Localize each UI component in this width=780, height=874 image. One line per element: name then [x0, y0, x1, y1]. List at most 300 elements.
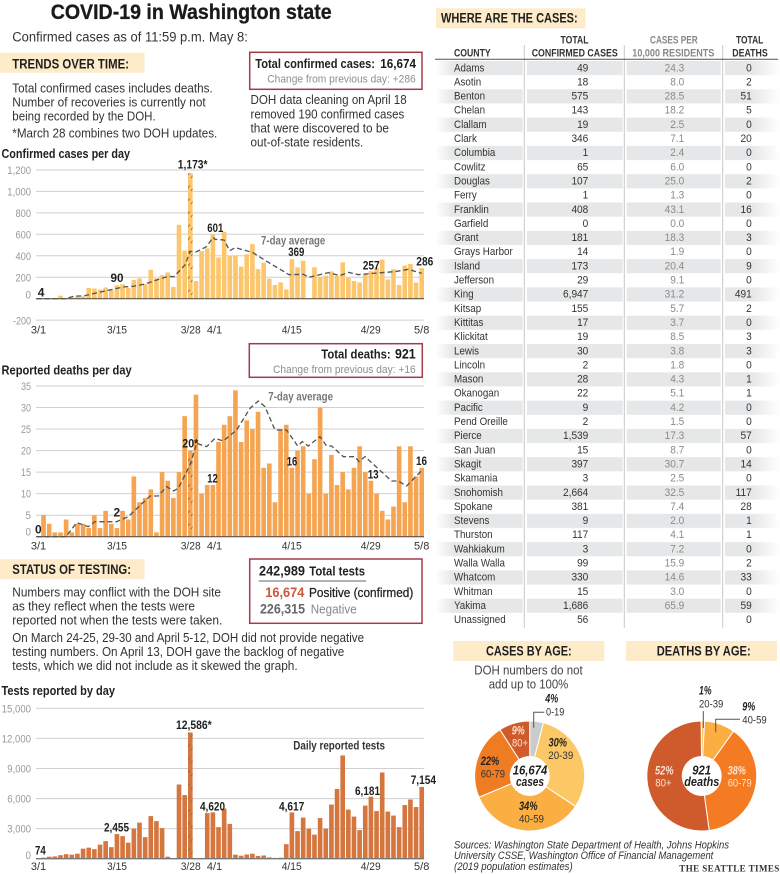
column: county names: Yakima: [454, 601, 486, 612]
column: total confirmed cases: 181: [571, 232, 588, 244]
bar chart: confirmed cases per day: 7-day average: [261, 235, 325, 247]
column: total confirmed cases: 2: [583, 416, 588, 428]
column: cases per 10,000 residents: 18.3: [665, 232, 684, 244]
column: total deaths: 3: [746, 232, 752, 244]
column: total confirmed cases: 346: [571, 133, 588, 145]
sources: [454, 839, 730, 873]
table: cases by county: [435, 34, 780, 628]
column: total deaths: 2: [746, 557, 752, 570]
donut chart: deaths by age: 1%: [699, 685, 712, 697]
column: county names: Franklin: [454, 204, 489, 216]
donut chart: cases by age: 20-39: [548, 750, 573, 762]
donut chart: cases by age: 9%: [512, 725, 525, 737]
column: total confirmed cases: 117: [572, 529, 588, 541]
donut chart: cases by age: 30%: [548, 738, 567, 750]
bar chart: tests reported by day: 5/8: [414, 861, 429, 873]
column: total deaths: 0: [746, 444, 752, 456]
column: total confirmed cases: 9: [583, 515, 588, 527]
column: cases per 10,000 residents: [665, 62, 684, 612]
bar chart: confirmed cases per day: 257: [363, 258, 380, 272]
bar chart: reported deaths per day: 0: [26, 527, 31, 539]
column: total deaths: 0: [746, 317, 752, 329]
donut chart: cases by age: 0-19: [546, 707, 564, 719]
bar chart: tests reported by day: 4,620: [200, 800, 225, 814]
bar chart: reported deaths per day: 16: [287, 454, 298, 468]
column: cases per 10,000 residents: 7.1: [670, 133, 684, 145]
bar chart: tests reported by day: 3/1: [31, 861, 46, 873]
column: cases per 10,000 residents: 15.9: [665, 557, 684, 570]
bar chart: reported deaths per day: 3/15: [107, 540, 127, 552]
column: cases per 10,000 residents: 43.1: [665, 203, 684, 216]
column: county names: Skagit: [454, 459, 481, 471]
donut chart: cases by age: 16,674: [513, 763, 547, 777]
bar chart: reported deaths per day: 0: [35, 522, 42, 536]
column: cases per 10,000 residents: 1.8: [670, 359, 684, 372]
column: total deaths: 0: [746, 543, 752, 556]
bar chart: tests reported by day: 4/15: [282, 861, 302, 873]
column: cases per 10,000 residents: 3.0: [670, 585, 684, 598]
column: county names: Benton: [454, 91, 485, 103]
column: total deaths: 14: [740, 458, 752, 471]
note: numbers do not add up: add up to 100%: [489, 677, 568, 691]
bar chart: tests reported by day: 7,154: [411, 773, 436, 787]
bar chart: confirmed cases per day: 4/1: [207, 324, 222, 336]
column: total deaths: 2: [746, 76, 752, 89]
bar chart: tests reported by day: 4,617: [279, 800, 305, 814]
table header: COUNTY: [454, 48, 491, 60]
column: county names: Unassigned: [454, 615, 506, 626]
bar chart: confirmed cases per day: 3/1: [31, 324, 46, 336]
text block: data cleaning note: DOH data cleaning on April 18: [250, 92, 407, 107]
bar chart: confirmed cases per day: 200: [16, 272, 31, 284]
column: county names: Garfield: [454, 218, 488, 230]
text block: data cleaning note: out-of-state residents.: [250, 134, 363, 149]
donut chart: deaths by age: [647, 685, 767, 831]
bar chart: confirmed cases per day: 286: [416, 255, 434, 269]
bar chart: confirmed cases per day: 601: [207, 221, 224, 235]
column: total deaths: 0: [746, 472, 752, 485]
column: county names: Ferry: [454, 190, 478, 202]
donut chart: deaths by age: 9%: [742, 702, 755, 714]
text block: trends note: [12, 80, 217, 141]
column: total confirmed cases: 18: [577, 76, 588, 89]
bar chart: confirmed cases per day: 369: [288, 245, 305, 259]
callout: total deaths: Total deaths:: [321, 347, 391, 362]
column: total deaths: 0: [746, 585, 752, 598]
column: county names: San Juan: [454, 445, 496, 457]
column: cases per 10,000 residents: 28.5: [665, 90, 684, 103]
column: cases per 10,000 residents: 32.5: [665, 486, 684, 499]
column: county names: Thurston: [454, 530, 493, 541]
bar chart: tests reported by day: 3/28: [181, 861, 201, 873]
heading: trends over time: TRENDS OVER TIME:: [12, 56, 129, 71]
bar chart: confirmed cases per day: 1,000: [7, 186, 31, 198]
column: cases per 10,000 residents: 2.4: [670, 147, 684, 159]
bar chart: confirmed cases per day: 5/8: [414, 324, 429, 336]
donut chart: deaths by age: 38%: [727, 765, 746, 777]
column: county names: Clallam: [454, 119, 487, 131]
column: total deaths: 0: [746, 246, 752, 258]
column: total deaths: 9: [746, 260, 752, 273]
bar chart: reported deaths per day: 4/1: [207, 540, 222, 552]
chart heading: reported deaths per day: Reported deaths per day: [2, 363, 132, 377]
bar chart: tests reported by day: 3/15: [107, 861, 127, 873]
column: cases per 10,000 residents: 2.5: [670, 119, 684, 131]
table header: [454, 34, 768, 60]
callout: total confirmed cases: [250, 52, 422, 89]
callout: testing totals: [250, 559, 422, 623]
bar chart: tests reported by day: 4/1: [207, 861, 222, 873]
column: cases per 10,000 residents: 7.4: [670, 501, 684, 513]
bar chart: tests reported by day: 74: [35, 843, 46, 857]
bar chart: confirmed cases per day: 4: [38, 286, 45, 300]
text block: trends note: being recorded by the DOH.: [12, 108, 156, 123]
column: total confirmed cases: 107: [571, 175, 588, 188]
bar chart: reported deaths per day: 2: [114, 506, 120, 520]
heading: where are the cases: WHERE ARE THE CASES:: [441, 11, 578, 26]
column: total deaths: 57: [740, 430, 752, 442]
bar chart: confirmed cases per day: 600: [16, 229, 31, 241]
chart heading: tests reported by day: Tests reported by day: [2, 684, 115, 698]
table row stripes: [435, 45, 780, 628]
column: total deaths: 16: [740, 203, 752, 216]
column: cases per 10,000 residents: 30.7: [665, 458, 684, 471]
bar chart: reported deaths per day: 30: [21, 402, 31, 414]
table header: 10,000 RESIDENTS: [632, 48, 714, 60]
column: cases per 10,000 residents: 6.0: [670, 161, 684, 173]
bar chart: tests reported by day: 6,181: [355, 784, 380, 798]
note: numbers do not add up: [474, 663, 583, 691]
callout: total confirmed cases: Total confirmed cases:: [255, 57, 375, 71]
bar chart: confirmed cases per day: 800: [16, 208, 31, 220]
column: total confirmed cases: 575: [571, 90, 588, 103]
column: total confirmed cases: 99: [577, 557, 588, 570]
bar chart: reported deaths per day: 15: [21, 467, 31, 479]
text block: testing note: testing numbers. On April 13, DOH gave the backlog of negative: [12, 644, 344, 659]
callout: testing totals: Negative: [311, 603, 357, 617]
donut chart: deaths by age: 40-59: [742, 714, 767, 726]
heading: status of testing: STATUS OF TESTING:: [12, 562, 131, 577]
bar chart: tests reported by day: 12,000: [2, 733, 31, 745]
column: total confirmed cases: 0: [583, 218, 588, 230]
column: cases per 10,000 residents: 1.5: [670, 416, 684, 428]
column: cases per 10,000 residents: 4.2: [670, 402, 684, 414]
table header: TOTAL: [736, 34, 764, 46]
callout: total confirmed cases: Change from previous day: +286: [267, 73, 416, 85]
column: total deaths: 3: [746, 331, 752, 343]
column: total confirmed cases: 155: [571, 302, 588, 315]
column: total deaths: 0: [746, 62, 752, 74]
column: cases per 10,000 residents: 9.1: [670, 274, 684, 287]
bar chart: tests reported by day: 6,000: [7, 794, 31, 806]
column: cases per 10,000 residents: 31.2: [665, 288, 684, 301]
column: total confirmed cases: 49: [577, 62, 588, 74]
bar chart: tests reported by day: 0: [26, 850, 31, 862]
column: cases per 10,000 residents: 7.2: [670, 543, 684, 556]
column: cases per 10,000 residents: 4.1: [670, 529, 684, 541]
callout: testing totals: 226,315: [260, 602, 305, 617]
donut chart: deaths by age: 20-39: [699, 699, 723, 711]
bar chart: confirmed cases per day: [7, 157, 434, 336]
column: county names: Whitman: [454, 586, 493, 598]
column: total confirmed cases: 2,664: [563, 486, 588, 499]
column: county names: Pierce: [454, 431, 482, 442]
column: total deaths: 1: [746, 387, 752, 400]
bar chart: tests reported by day: 15,000: [2, 703, 31, 715]
column: county names: Skamania: [454, 473, 498, 485]
text block: testing note: [12, 585, 364, 673]
bar chart: confirmed cases per day: 90: [110, 271, 124, 285]
table header: TOTAL: [560, 34, 589, 46]
column: total confirmed cases: 3: [583, 472, 588, 485]
column: county names: Cowlitz: [454, 162, 486, 174]
callout: testing totals: 242,989: [259, 564, 305, 579]
column: county names: Walla Walla: [454, 558, 505, 570]
column: cases per 10,000 residents: 25.0: [665, 175, 684, 188]
column: county names: Lewis: [454, 346, 479, 357]
bar chart: tests reported by day: 2,455: [104, 821, 129, 835]
heading: where are the cases: [436, 8, 586, 28]
bar chart: reported deaths per day: 20: [21, 446, 31, 458]
column: total confirmed cases: 173: [571, 260, 588, 273]
column: cases per 10,000 residents: 3.7: [670, 317, 684, 329]
column: total deaths: 0: [746, 416, 752, 428]
column: total deaths: 0: [746, 218, 752, 230]
sources: Sources: Washington State Department of Health, Johns Hopkins: [454, 839, 730, 851]
donut chart: cases by age: 34%: [519, 801, 538, 813]
heading: deaths by age: DEATHS BY AGE:: [657, 644, 751, 659]
callout: total confirmed cases: 16,674: [380, 56, 417, 71]
column: total deaths: 0: [746, 119, 752, 131]
column: cases per 10,000 residents: 0.0: [670, 218, 684, 230]
column: total deaths: 33: [740, 571, 752, 584]
heading: cases by age: [453, 641, 604, 661]
column: county names: Grant: [454, 233, 479, 244]
bar chart: tests reported by day: 3,000: [7, 824, 31, 836]
column: total confirmed cases: 15: [577, 444, 588, 456]
column: total deaths: 20: [740, 133, 752, 145]
callout: testing totals: Positive (confirmed): [309, 586, 413, 600]
column: county names: Spokane: [454, 501, 493, 513]
heading: trends over time: [0, 53, 144, 73]
column: total confirmed cases: 19: [577, 331, 588, 343]
column: county names: Wahkiakum: [454, 544, 505, 556]
column: county names: Kittitas: [454, 318, 483, 329]
column: cases per 10,000 residents: 24.3: [665, 62, 684, 74]
column: total deaths: 0: [746, 147, 752, 159]
column: total confirmed cases: 9: [583, 402, 588, 414]
table header: CASES PER: [650, 34, 698, 46]
credit: the seattle times: THE SEATTLE TIMES: [679, 864, 779, 874]
column: county names: Whatcom: [454, 572, 495, 584]
column: total deaths: 491: [735, 288, 752, 301]
callout: total deaths: 921: [395, 346, 416, 362]
donut chart: cases by age: 22%: [480, 756, 499, 768]
column: county names: King: [454, 289, 474, 301]
column: total confirmed cases: 30: [577, 345, 588, 357]
callout: testing totals: Total tests: [309, 564, 365, 579]
column: county names: Jefferson: [454, 275, 494, 287]
column: total confirmed cases: 22: [577, 387, 588, 400]
bar chart: reported deaths per day: 5/8: [414, 540, 429, 552]
column: total deaths: 5: [746, 104, 752, 117]
table header: DEATHS: [732, 48, 768, 60]
donut chart: deaths by age: 80+: [655, 778, 672, 790]
column: total confirmed cases: 1,539: [563, 430, 588, 442]
column: cases per 10,000 residents: 1.9: [670, 246, 684, 258]
column: county names: Pend Oreille: [454, 417, 508, 428]
column: county names: Mason: [454, 374, 484, 386]
text block: data cleaning note: [250, 92, 407, 149]
column: county names: Island: [454, 261, 480, 273]
text block: data cleaning note: removed 190 confirmed cases: [250, 106, 405, 121]
donut chart: cases by age: 80+: [512, 738, 528, 750]
bar chart: confirmed cases per day: 3/28: [181, 324, 201, 336]
column: county names: Pacific: [454, 402, 483, 414]
column: county names: Stevens: [454, 516, 489, 527]
column: total deaths: 0: [746, 161, 752, 173]
column: county names: [454, 63, 513, 626]
column: total confirmed cases: 19: [577, 119, 588, 131]
bar chart: tests reported by day: 4/29: [361, 861, 381, 873]
column: total confirmed cases: 14: [577, 246, 588, 258]
column: county names: Clark: [454, 134, 478, 145]
column: total confirmed cases: 2: [583, 359, 588, 372]
donut chart: cases by age: 40-59: [519, 813, 544, 825]
heading: cases by age: CASES BY AGE:: [486, 644, 572, 659]
subtitle: Confirmed cases as of 11:59 p.m. May 8:: [12, 29, 248, 44]
text block: trends note: *March 28 combines two DOH updates.: [12, 126, 217, 141]
column: cases per 10,000 residents: 4.3: [670, 373, 684, 386]
column: cases per 10,000 residents: 17.3: [665, 430, 684, 442]
column: total confirmed cases: 29: [577, 274, 588, 287]
text block: testing note: reported not when the tests were taken.: [12, 613, 222, 628]
column: county names: Grays Harbor: [454, 247, 513, 258]
bar chart: tests reported by day: Daily reported tests: [293, 740, 385, 752]
column: cases per 10,000 residents: 18.2: [665, 104, 684, 117]
column: cases per 10,000 residents: 3.8: [670, 345, 684, 357]
bar chart: reported deaths per day: 10: [21, 489, 31, 501]
donut chart: cases by age: 4%: [544, 693, 558, 705]
sources: (2019 population estimates): [454, 861, 573, 873]
bar chart: reported deaths per day: 3/28: [181, 540, 201, 552]
column: total deaths: 0: [746, 402, 752, 414]
column: cases per 10,000 residents: 8.7: [670, 444, 684, 456]
bar chart: reported deaths per day: 13: [368, 467, 379, 481]
callout: testing totals: 16,674: [265, 584, 304, 600]
column: total confirmed cases: 397: [571, 458, 588, 471]
bar chart: reported deaths per day: 7-day average: [268, 391, 333, 403]
bar chart: confirmed cases per day: 4/29: [361, 324, 381, 336]
column: total confirmed cases: 1: [583, 189, 588, 202]
column: total confirmed cases: 65: [577, 161, 588, 173]
column: cases per 10,000 residents: 8.0: [670, 76, 684, 89]
column: total deaths: 2: [746, 175, 752, 188]
text block: data cleaning note: that were discovered to be: [250, 120, 389, 135]
column: cases per 10,000 residents: 8.5: [670, 331, 684, 343]
bar chart: tests reported by day: [2, 703, 436, 873]
column: total confirmed cases: 56: [577, 614, 588, 626]
column: total confirmed cases: [563, 62, 588, 626]
column: county names: Snohomish: [454, 487, 503, 499]
bar chart: reported deaths per day: 5: [26, 510, 31, 522]
column: total deaths: [735, 62, 752, 626]
bar chart: confirmed cases per day: 400: [16, 251, 31, 263]
bar chart: confirmed cases per day: -200: [13, 315, 31, 327]
column: total confirmed cases: 28: [577, 373, 588, 386]
donut chart: deaths by age: 921: [692, 763, 711, 777]
column: total confirmed cases: 15: [577, 585, 588, 598]
column: total deaths: 0: [746, 189, 752, 202]
bar chart: confirmed cases per day: 0: [26, 289, 31, 301]
column: total deaths: 0: [746, 274, 752, 287]
column: county names: Adams: [454, 63, 484, 74]
text block: trends note: Total confirmed cases includes deaths.: [12, 80, 213, 95]
column: county names: Lincoln: [454, 360, 485, 372]
chart heading: confirmed cases per day: Confirmed cases per day: [2, 147, 130, 161]
column: total deaths: 1: [746, 515, 752, 527]
column: county names: Douglas: [454, 176, 490, 188]
column: county names: Columbia: [454, 148, 496, 159]
donut chart: deaths by age: 52%: [655, 765, 674, 777]
donut chart: cases by age: cases: [516, 775, 544, 789]
column: total confirmed cases: 330: [571, 571, 588, 584]
column: cases per 10,000 residents: 5.7: [670, 302, 684, 315]
bar chart: reported deaths per day: 25: [21, 424, 31, 436]
column: total confirmed cases: 3: [583, 543, 588, 556]
bar chart: reported deaths per day: 35: [21, 381, 31, 393]
column: total deaths: 3: [746, 345, 752, 357]
table header: CONFIRMED CASES: [532, 48, 618, 60]
column: cases per 10,000 residents: 65.9: [665, 600, 684, 612]
column: county names: Kitsap: [454, 303, 481, 315]
column: county names: Asotin: [454, 77, 481, 89]
column: county names: Okanogan: [454, 388, 499, 400]
bar chart: confirmed cases per day: 4/15: [282, 324, 302, 336]
column: total confirmed cases: 1: [583, 147, 588, 159]
heading: status of testing: [0, 559, 144, 579]
column: total deaths: 51: [740, 90, 752, 103]
title: COVID-19 in Washington state: [51, 1, 332, 24]
text block: testing note: Numbers may conflict with the DOH site: [12, 585, 221, 600]
column: total deaths: 0: [746, 614, 752, 626]
column: cases per 10,000 residents: 5.1: [670, 387, 684, 400]
column: total deaths: 117: [736, 486, 752, 499]
column: total deaths: 1: [746, 529, 752, 541]
column: cases per 10,000 residents: 1.3: [670, 189, 684, 202]
bar chart: reported deaths per day: 20*: [182, 437, 199, 451]
bar chart: tests reported by day: 12,586*: [176, 718, 212, 732]
donut chart: deaths by age: deaths: [684, 775, 719, 789]
note: numbers do not add up: DOH numbers do not: [474, 663, 583, 677]
column: total confirmed cases: 1,686: [563, 600, 588, 612]
column: total deaths: 28: [740, 501, 752, 513]
bar chart: reported deaths per day: 4/29: [361, 540, 381, 552]
column: total confirmed cases: 6,947: [563, 288, 588, 301]
column: total deaths: 59: [740, 600, 752, 612]
column: cases per 10,000 residents: 20.4: [665, 260, 684, 273]
bar chart: tests reported by day: 9,000: [7, 764, 31, 776]
text block: testing note: On March 24-25, 29-30 and April 5-12, DOH did not provide negative: [12, 630, 364, 645]
column: total confirmed cases: 143: [571, 104, 588, 117]
callout: total deaths: [249, 344, 422, 377]
text block: trends note: Number of recoveries is currently not: [12, 94, 206, 109]
heading: deaths by age: [626, 641, 777, 661]
column: cases per 10,000 residents: 14.6: [665, 571, 684, 584]
bar chart: reported deaths per day: 12: [207, 472, 218, 486]
bar chart: reported deaths per day: 3/1: [31, 540, 46, 552]
bar chart: confirmed cases per day: 3/15: [107, 324, 127, 336]
